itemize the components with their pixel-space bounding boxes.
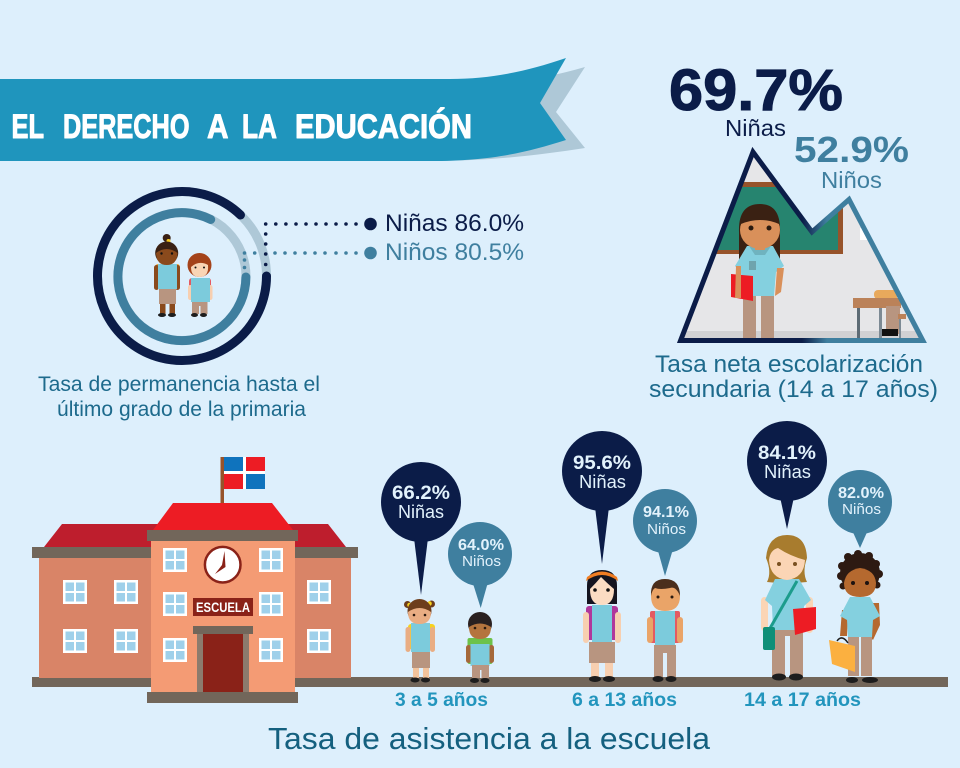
girl student (731, 204, 784, 339)
dotted leaders (243, 218, 377, 269)
figure: school girl (583, 570, 621, 682)
figure: school boy (647, 579, 683, 682)
mountain chart with classroom (677, 147, 927, 343)
ring chart (98, 191, 266, 360)
caption: school attendance: Tasa de asistencia a la escuela (268, 721, 711, 756)
bubble: boys 14 to 17 (828, 470, 892, 548)
sign: ESCUELA (196, 599, 250, 615)
caption: retention (38, 373, 320, 421)
bubble: girls 14 to 17: Niñas (764, 462, 811, 482)
desk (853, 290, 906, 338)
bubble: boys 14 to 17: 82.0% (838, 485, 884, 502)
bubble: boys 6 to 13: 94.1% (643, 504, 689, 521)
figure: teen girl (761, 535, 816, 680)
label: boys: Niños (821, 167, 882, 193)
title banner (0, 58, 585, 161)
caption: retention: Tasa de permanencia hasta el (38, 373, 320, 396)
bubble: girls 3 to 5: 66.2% (392, 483, 450, 504)
age label: 14 to 17: 14 a 17 años (744, 689, 861, 711)
school building (32, 457, 358, 703)
title text: A (207, 108, 228, 146)
bubble: boys 14 to 17: Niños (842, 501, 881, 518)
legend: girls: Niñas 86.0% (385, 210, 524, 237)
label: girls: Niñas (725, 115, 786, 141)
title text: LA (242, 108, 277, 146)
windows (63, 548, 331, 662)
stat: girls: 69.7% (669, 58, 843, 123)
figure: small girl (404, 599, 435, 682)
bubble: girls 3 to 5: Niñas (398, 502, 444, 522)
title text: EDUCACIÓN (295, 108, 472, 146)
title text (12, 108, 472, 146)
caption: retention: último grado de la primaria (57, 398, 306, 421)
legend: boys: Niños 80.5% (385, 239, 524, 266)
bubble: girls 6 to 13: 95.6% (573, 453, 631, 474)
age label: 6 to 13: 6 a 13 años (572, 689, 677, 711)
door (193, 626, 253, 692)
bubble: girls 3 to 5 (381, 462, 461, 595)
stat: boys: 52.9% (794, 129, 909, 170)
bubble: girls 6 to 13 (562, 431, 642, 564)
title text: EL (12, 108, 44, 146)
caption: enrollment: secundaria (14 a 17 años) (649, 376, 938, 403)
bubble: boys 3 to 5 (448, 522, 512, 608)
bubble: girls 14 to 17: 84.1% (758, 443, 816, 464)
panel: retention rate (38, 191, 524, 421)
bubble: boys 6 to 13: Niños (647, 521, 686, 538)
bubble: boys 3 to 5: Niños (462, 553, 501, 570)
bubble: boys 3 to 5: 64.0% (458, 537, 504, 554)
clock (205, 547, 240, 582)
flag (220, 457, 265, 504)
panel: secondary enrollment (649, 58, 938, 403)
icon: girl and boy in ring (154, 234, 212, 317)
title text: DERECHO (63, 108, 190, 146)
figure: small boy (466, 612, 494, 683)
bubble: girls 6 to 13: Niñas (579, 472, 626, 492)
age label: 3 to 5: 3 a 5 años (395, 689, 488, 711)
bubble: boys 6 to 13 (633, 489, 697, 576)
bubble: girls 14 to 17 (747, 421, 827, 529)
caption: enrollment (649, 351, 938, 403)
ground line (32, 677, 948, 687)
caption: enrollment: Tasa neta escolarización (655, 351, 923, 378)
figure: teen boy (829, 550, 883, 683)
